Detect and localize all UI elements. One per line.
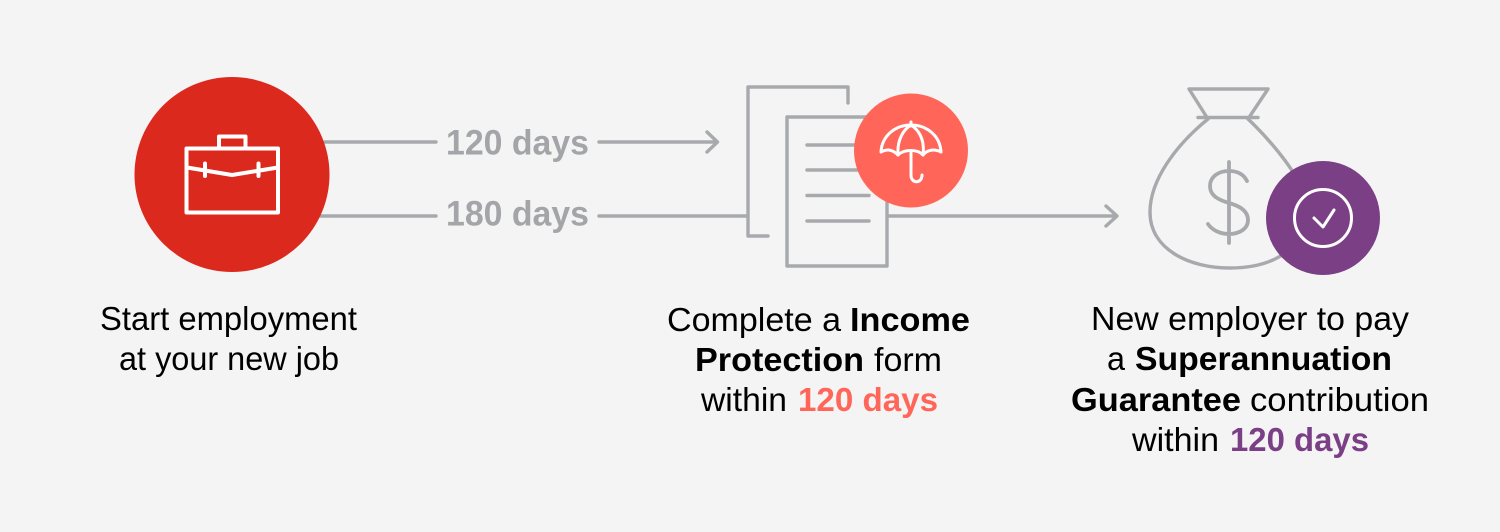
icon: back document (748, 87, 848, 236)
caption: superannuation guarantee: New employer to pay (1091, 300, 1409, 337)
icon: briefcase (186, 136, 278, 212)
caption: superannuation guarantee: within (1131, 421, 1219, 458)
icon: money bag (1150, 89, 1293, 268)
icon: umbrella (881, 122, 941, 182)
caption: superannuation guarantee: 120 days (1230, 421, 1369, 458)
caption: income protection form (667, 301, 970, 418)
step 1 icon: red circle with briefcase (134, 77, 330, 272)
caption: superannuation guarantee: contribution (1250, 381, 1429, 418)
caption: income protection form: within (700, 381, 787, 418)
icon: document text lines (807, 145, 870, 221)
caption: income protection form: 120 days (798, 381, 938, 418)
caption: start employment: at your new job (119, 340, 339, 377)
caption: income protection form: Protection (695, 341, 864, 378)
caption: income protection form: form (874, 341, 942, 378)
caption: income protection form: Income (850, 301, 970, 338)
step 2 icon: documents with umbrella badge (748, 87, 968, 266)
badge: coral circle with umbrella (854, 94, 968, 208)
label: 120 days: 120 days (446, 124, 589, 162)
caption: superannuation guarantee: a (1107, 340, 1126, 377)
caption: superannuation guarantee (1071, 300, 1429, 458)
icon: front document (787, 117, 887, 266)
timeline: 120 days arrow (325, 124, 718, 162)
caption: start employment (100, 300, 357, 377)
icon: dollar sign (1208, 162, 1248, 243)
caption: superannuation guarantee: Guarantee (1071, 381, 1241, 418)
icon: circled check (1294, 190, 1352, 246)
label: 180 days: 180 days (446, 194, 589, 234)
timeline: 180 days arrow (320, 194, 1117, 234)
badge: purple circle with check (1266, 161, 1380, 275)
step 3 icon: money bag with check badge (1150, 89, 1380, 275)
caption: income protection form: Complete a (667, 301, 842, 338)
caption: start employment: Start employment (100, 300, 357, 337)
caption: superannuation guarantee: Superannuation (1135, 340, 1392, 377)
